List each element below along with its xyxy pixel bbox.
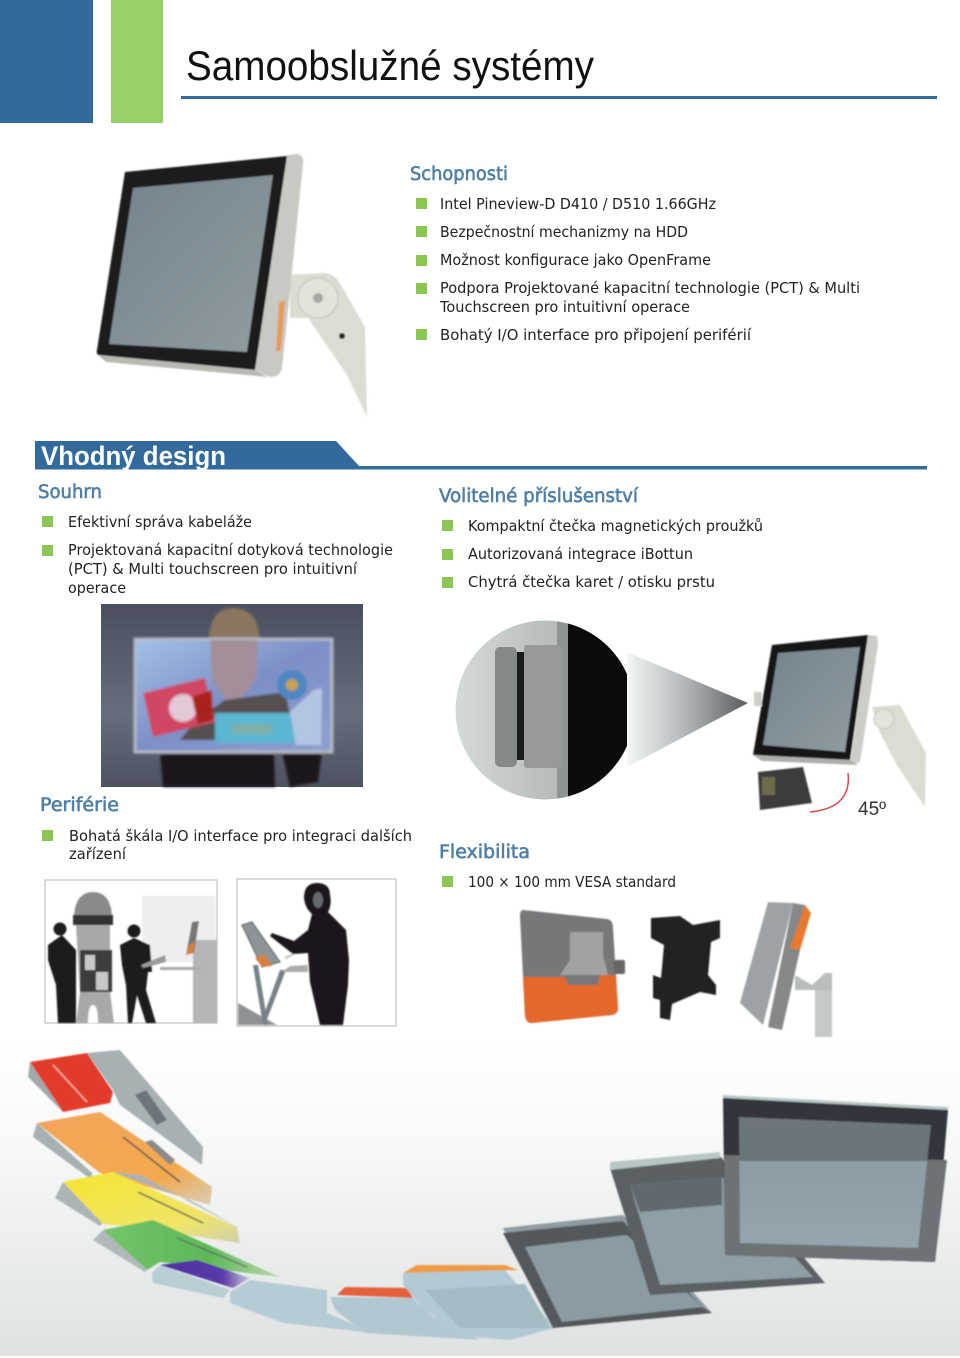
section banner: Vhodný design: Vhodný design: [41, 441, 226, 471]
image: monitor on arm: [97, 154, 367, 417]
section banner: Vhodný design: [35, 441, 927, 471]
list: summary: (PCT) & Multi touchscreen pro intuitivní: [68, 560, 358, 578]
monitor: pale edge: [230, 1280, 373, 1333]
list: capabilities: Možnost konfigurace jako OpenFrame: [440, 251, 711, 269]
image: VESA bracket: [651, 916, 720, 1020]
image: kiosk silhouette right: [237, 879, 396, 1026]
panel: Periférie: [40, 795, 412, 863]
panel: Souhrn: [38, 482, 393, 597]
header bar: green block: [111, 0, 163, 123]
text: VESA: 100 × 100 mm VESA standard: [468, 873, 676, 891]
image: woman with holographic touchscreen: [101, 604, 363, 787]
list: summary: Efektivní správa kabeláže: [68, 513, 252, 531]
list: accessories: [442, 517, 763, 591]
image: row of colourful monitors: [28, 1050, 948, 1340]
list: summary: operace: [68, 579, 126, 597]
background gradient: monitor range: [0, 1040, 960, 1356]
list: summary: Projektovaná kapacitní dotyková technologie: [68, 541, 393, 559]
monitor: red: [28, 1050, 203, 1165]
list: capabilities: Intel Pineview-D D410 / D510 1.66GHz: [440, 195, 716, 213]
panel: Schopnosti: [410, 164, 860, 344]
image: kiosk silhouettes left: [45, 880, 217, 1023]
title underline: [181, 96, 937, 99]
text: peripherals: Bohatá škála I/O interface pro integraci dalších: [69, 827, 412, 845]
list: accessories: Chytrá čtečka karet / otisku prstu: [468, 573, 715, 591]
image: side-view monitor on pole: [740, 902, 832, 1037]
list: capabilities: Bohatý I/O interface pro připojení periférií: [440, 326, 752, 344]
panel: Flexibilita: [439, 842, 676, 891]
list: summary: [42, 513, 393, 597]
monitor: green: [93, 1220, 280, 1277]
list: capabilities: Podpora Projektované kapacitní technologie (PCT) & Multi: [440, 279, 860, 297]
monitor: large dark: [723, 1095, 948, 1262]
text: peripherals: zařízení: [69, 845, 127, 863]
image: card reader with zoom cone and monitor: [455, 620, 926, 820]
list: accessories: Kompaktní čtečka magnetických proužků: [468, 517, 763, 535]
image: VESA mount monitor back: [520, 910, 625, 1023]
list: capabilities: Bezpečnostní mechanizmy na HDD: [440, 223, 688, 241]
monitor: small dark: [503, 1215, 712, 1328]
list: capabilities: [416, 195, 860, 344]
label: 45 degrees: 45º: [858, 799, 886, 820]
heading: Flexibilita: Flexibilita: [439, 842, 530, 863]
monitor: medium dark: [610, 1152, 825, 1295]
header bar: blue block: [0, 0, 93, 123]
monitor: orange edge: [403, 1265, 555, 1340]
panel: Volitelné příslušenství: [439, 486, 763, 591]
monitor: red edge: [330, 1287, 480, 1340]
monitor: orange: [33, 1112, 212, 1205]
list: accessories: Autorizovaná integrace iBottun: [468, 545, 693, 563]
list: capabilities: Touchscreen pro intuitivní operace: [439, 298, 690, 316]
text: peripherals: [42, 827, 412, 863]
monitor: yellow: [55, 1172, 240, 1243]
heading: Periférie: Periférie: [40, 795, 119, 816]
title: Samoobslužné systémy: [186, 42, 594, 89]
heading: Schopnosti: Schopnosti: [410, 164, 508, 185]
monitor: purple: [152, 1260, 250, 1298]
heading: Souhrn: Souhrn: [38, 482, 102, 503]
heading: Volitelné příslušenství: Volitelné příslušenství: [439, 486, 639, 507]
